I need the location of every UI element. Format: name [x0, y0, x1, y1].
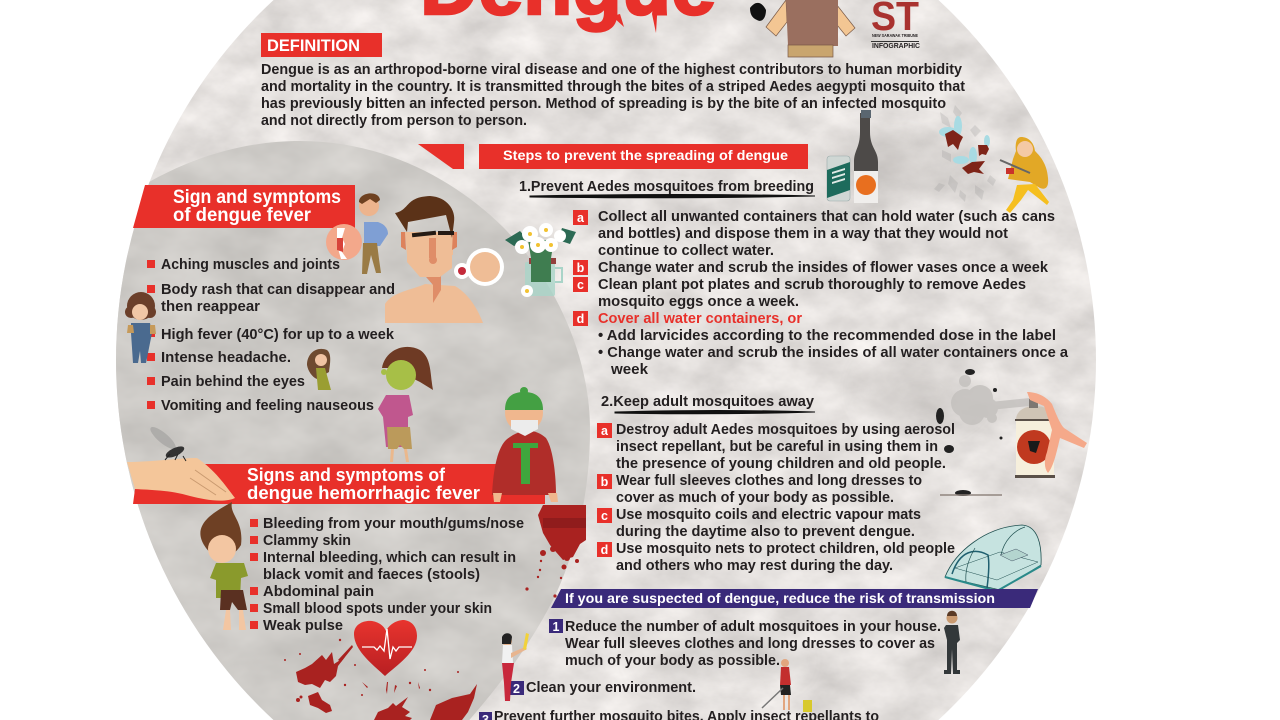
definition text: Dengue is as an arthropod-borne viral disease and one of the highest contributors to human morbidity — [261, 62, 962, 78]
item c: c — [601, 509, 608, 523]
item c — [573, 277, 1026, 310]
icon: mosquito on hand — [127, 424, 235, 501]
panel: keep mosquitoes away — [597, 394, 955, 574]
banner: Sign and symptoms — [173, 187, 341, 208]
item d: • Add larvicides according to the recommended dose in the label — [598, 328, 1056, 344]
step 1: 1 — [553, 620, 560, 634]
icon: nauseous child — [378, 347, 433, 462]
hemorrhagic symptom list: Bleeding from your mouth/gums/nose — [263, 516, 524, 532]
item a: and bottles) and dispose them in a way that they would not — [598, 226, 1008, 242]
logo: ST infographic: INFOGRAPHIC — [872, 43, 920, 50]
definition text: and mortality in the country. It is transmitted through the bites of a striped Aedes aegypti mosquito that — [261, 79, 965, 95]
item a: a — [601, 424, 609, 438]
icon: blood splatters — [284, 505, 586, 720]
panel: if suspected — [479, 589, 1038, 720]
symptom list: Intense headache. — [161, 350, 291, 366]
textured circular background — [110, 0, 1110, 720]
symptom list: then reappear — [161, 299, 260, 315]
item a: a — [577, 211, 585, 225]
item c: mosquito eggs once a week. — [598, 294, 799, 310]
icon: child in green shirt — [200, 502, 248, 630]
hemorrhagic symptom list: black vomit and faeces (stools) — [263, 567, 480, 583]
item d: and others who may rest during the day. — [616, 558, 893, 574]
item a: the presence of young children and old people. — [616, 456, 946, 472]
item a: Collect all unwanted containers that can hold water (such as cans — [598, 209, 1055, 225]
definition text: has previously bitten an infected person. Method of spreading is by the bite of an infected mosquito — [261, 96, 946, 112]
item b: b — [601, 475, 609, 489]
hemorrhagic symptom list — [250, 516, 524, 634]
item b: Wear full sleeves clothes and long dresses to — [616, 473, 922, 489]
item d: Use mosquito nets to protect children, old people — [616, 541, 955, 557]
panel: sign and symptoms of dengue fever — [133, 185, 395, 414]
definition heading: DEFINITION — [267, 37, 360, 55]
step 2: Clean your environment. — [526, 680, 696, 696]
symptom list: Pain behind the eyes — [161, 374, 305, 390]
definition text — [261, 62, 965, 129]
icon: small girl with headache — [307, 349, 331, 390]
banner: of dengue fever — [173, 205, 312, 226]
hemorrhagic symptom list: Abdominal pain — [263, 584, 374, 600]
heading: keep mosquitoes away: 2.Keep adult mosquitoes away — [601, 394, 814, 410]
item c: c — [577, 278, 584, 292]
icon: man with back pain — [326, 193, 388, 274]
banner — [133, 185, 355, 228]
banner — [133, 464, 545, 504]
panel: steps to prevent header — [418, 144, 808, 169]
icon: woman with vacuum — [762, 659, 812, 712]
panel: steps to prevent header: Steps to prevent the spreading of dengue — [503, 147, 788, 163]
item b: cover as much of your body as possible. — [616, 490, 894, 506]
hemorrhagic symptom list: Internal bleeding, which can result in — [263, 550, 516, 566]
icon: aerosol spray with hand and insects — [936, 369, 1087, 496]
definition text: and not directly from person to person. — [261, 113, 527, 129]
symptom list: High fever (40°C) for up to a week — [161, 327, 395, 343]
panel: prevent breeding — [519, 179, 1069, 378]
item d — [573, 311, 1069, 378]
banner: dengue hemorrhagic fever — [247, 483, 480, 503]
header bar: If you are suspected of dengue, reduce the risk of transmission — [565, 590, 995, 606]
item c: Clean plant pot plates and scrub thoroughly to remove Aedes — [598, 277, 1026, 293]
step 1 — [549, 619, 941, 669]
symptom list — [147, 257, 395, 414]
item b: b — [577, 261, 585, 275]
icon: flower vase — [505, 223, 576, 297]
step 1: Reduce the number of adult mosquitoes in your house. — [565, 619, 941, 635]
item b: Change water and scrub the insides of flower vases once a week — [598, 260, 1049, 276]
definition heading — [261, 33, 382, 57]
logo: ST infographic: NEW SARAWAK TRIBUNE — [872, 33, 918, 38]
hemorrhagic symptom list: Clammy skin — [263, 533, 351, 549]
panel: grey symptoms area — [100, 130, 600, 720]
icon: child with curly hair — [125, 292, 156, 363]
item d: d — [577, 312, 584, 326]
item c — [597, 507, 921, 540]
symptom list: Body rash that can disappear and — [161, 282, 395, 298]
step 2: 2 — [513, 682, 520, 696]
item d: • Change water and scrub the insides of all water containers once a — [598, 345, 1069, 361]
item a: Destroy adult Aedes mosquitoes by using aerosol — [616, 422, 955, 438]
icon: bearded man — [944, 611, 960, 674]
icon: bitten man at the top — [750, 0, 855, 57]
icon: mosquito net — [945, 525, 1041, 591]
hemorrhagic symptom list: Small blood spots under your skin — [263, 601, 492, 617]
chart icon: heart with ECG line — [354, 620, 417, 676]
icon: mosquitoes and sprayer figure — [934, 105, 1049, 213]
icon: boy with mask — [492, 387, 558, 502]
symptom list: Aching muscles and joints — [161, 257, 340, 273]
step 1: Wear full sleeves clothes and long dresses to cover as — [565, 636, 935, 652]
item a — [597, 422, 955, 472]
item a: continue to collect water. — [598, 243, 774, 259]
item a: insect repellant, but be careful in using them in — [616, 439, 938, 455]
item b — [597, 473, 922, 506]
item d: d — [601, 543, 608, 557]
panel: hemorrhagic fever — [133, 464, 545, 634]
banner: Signs and symptoms of — [247, 465, 446, 485]
icon: face with fever — [385, 196, 504, 323]
symptom list: Vomiting and feeling nauseous — [161, 398, 374, 414]
item a — [573, 209, 1055, 259]
item c: Use mosquito coils and electric vapour mats — [616, 507, 921, 523]
item d — [597, 541, 955, 574]
panel: definition — [261, 33, 965, 129]
item d: week — [610, 362, 649, 378]
heading: prevent breeding: 1.Prevent Aedes mosquitoes from breeding — [519, 179, 814, 195]
icon: can and bottle — [827, 110, 878, 203]
item c: during the daytime also to prevent dengue. — [616, 524, 915, 540]
hemorrhagic symptom list: Weak pulse — [263, 618, 343, 634]
step 1: much of your body as possible. — [565, 653, 780, 669]
item d: Cover all water containers, or — [598, 311, 802, 327]
icon: woman cleaning — [502, 633, 529, 701]
